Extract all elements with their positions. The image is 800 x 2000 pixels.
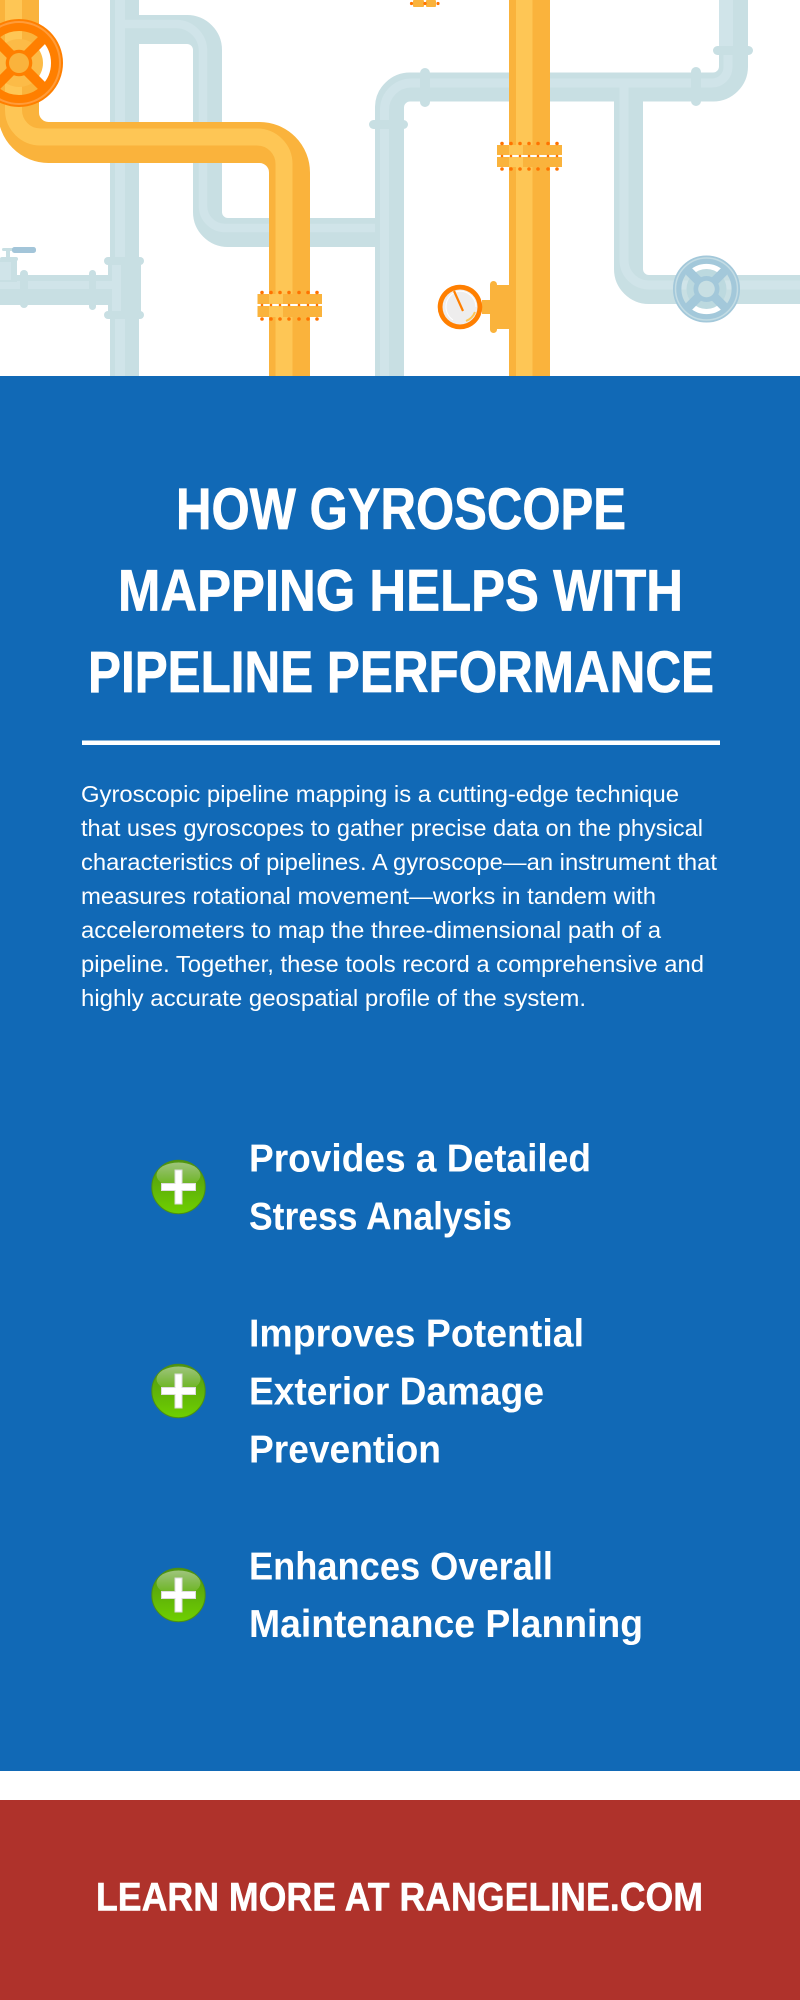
intro paragraph: accelerometers to map the three-dimensional path of a [81, 917, 662, 943]
item 2 label: Prevention [249, 1428, 441, 1472]
orange flange fragment at top [410, 0, 440, 7]
blue pipe flanges [369, 46, 753, 129]
title divider [82, 740, 720, 745]
orange pipe: left [14, 0, 290, 376]
orange flange: right pipe [497, 142, 562, 171]
item 1 label: Provides a Detailed [249, 1138, 591, 1180]
orange pipe: right [509, 0, 550, 376]
icon: orange valve wheel [0, 22, 60, 104]
blue pipe: S bend [125, 24, 381, 232]
item 2 label [249, 1312, 584, 1472]
intro paragraph: that uses gyroscopes to gather precise data on the physical [81, 815, 703, 841]
item 3 label: Enhances Overall [249, 1545, 553, 1588]
item 1 label [249, 1138, 591, 1238]
item 2 label: Exterior Damage [249, 1370, 544, 1414]
item 2 label: Improves Potential [249, 1312, 584, 1356]
intro paragraph: measures rotational movement—works in tandem with [81, 883, 656, 909]
intro paragraph: highly accurate geospatial profile of the system. [81, 985, 586, 1011]
panel: main blue [0, 376, 800, 1771]
intro paragraph [81, 781, 717, 1011]
list item 1 [152, 1138, 591, 1238]
item 1 label: Stress Analysis [249, 1196, 512, 1238]
item 3 label: Maintenance Planning [249, 1603, 643, 1646]
icon: blue valve wheel [676, 258, 738, 320]
intro paragraph: pipeline. Together, these tools record a comprehensive and [81, 951, 704, 977]
title [88, 477, 714, 705]
intro paragraph: Gyroscopic pipeline mapping is a cutting-edge technique [81, 781, 679, 807]
orange flange: left pipe [258, 291, 322, 321]
intro paragraph: characteristics of pipelines. A gyroscope—an instrument that [81, 849, 717, 875]
blue pipe: upper network [384, 0, 800, 376]
list item 2 [152, 1312, 584, 1472]
icon: green plus [152, 1364, 205, 1418]
item 3 label [249, 1545, 643, 1646]
icon: pressure gauge [438, 281, 509, 333]
icon: green plus [152, 1568, 205, 1622]
list item 3 [152, 1545, 643, 1646]
blue fitting: lower left [0, 247, 144, 319]
icon: green plus [152, 1160, 205, 1214]
footer band [0, 1800, 800, 2000]
footer call to action: LEARN MORE AT RANGELINE.COM [96, 1876, 703, 1920]
title: HOW GYROSCOPE [176, 477, 626, 542]
blue pipe: left vertical [110, 0, 139, 376]
title: MAPPING HELPS WITH [118, 558, 683, 624]
hero illustration: pipes [0, 0, 800, 376]
